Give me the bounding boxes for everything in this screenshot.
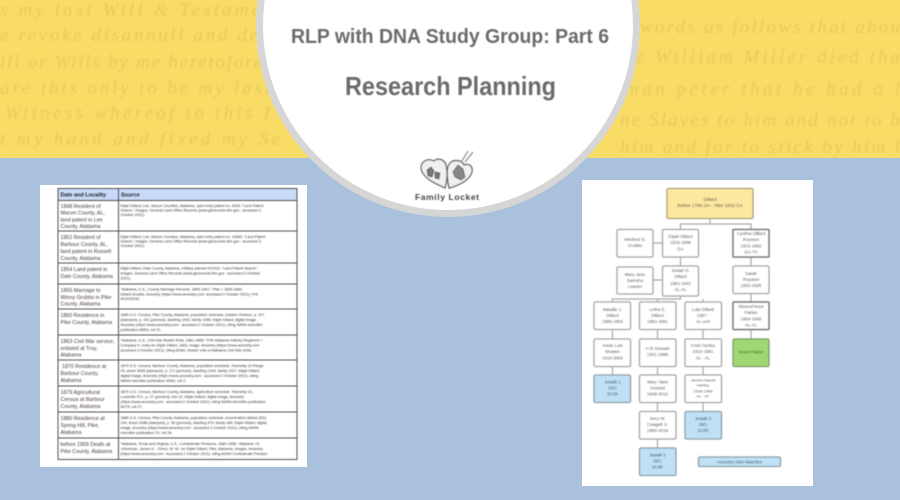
node labels: James Harold [691,378,715,382]
column: date and locality: Spring Hill, Pike, [60,423,99,429]
node labels: Elijah Dillard [668,234,693,239]
node labels: 1921-1998 [647,352,669,357]
column: source citations: NARA microfilm publication M593, roll 2. [120,379,186,383]
column: date and locality: County, Alabama [60,302,101,308]
banner: yellow handwritten document: him and for to stick by him l [620,137,900,158]
node labels: Dillard [651,313,664,318]
heading: study group title: RLP with DNA Study Group: Part 6 [291,26,609,48]
column: source citations: 1860 U.S. Census, Pike County, Alabama, population schedule, Eastern Division, p. 327 [120,313,264,317]
column: date and locality: Macon County, AL, [60,211,105,217]
node labels: Moates [605,349,620,354]
node labels: 1969-2019 [647,428,669,433]
column: date and locality: Alabama [60,352,81,358]
node labels: Royston [743,277,760,282]
node labels: Victor Parker [738,350,764,354]
node labels: Letha E. [649,307,666,312]
node labels: Annie Lois [602,343,624,348]
column: source citations: Elijah Dillard, Lee, Macon Counties, Alabama, cash entry patent no. 16589, "Land Patent [120,235,265,239]
column: source citations: publication M653, roll 21. [120,328,162,332]
node labels: 1816-1886 [670,240,692,245]
column: date and locality: 1870 Residence at [62,364,107,370]
column: source citations: microfilm publication T9, roll 28. [120,431,172,435]
banner: yellow handwritten document: ill or Wills by me heretofore [0,52,262,73]
node labels: H B Grissett [646,346,670,351]
node: Dillard root [667,188,753,218]
column headers: Source [121,192,140,198]
column: source citations: 1880 U.S. Census, Pike County, Alabama, population schedule, enumeration district (ED) [120,416,266,420]
nodes: DNA matches [594,375,780,476]
column: source citations: Louisville P.O., p. 27 (penned), line 22, Elijah Dillard; digital image, Ancestry [120,395,244,399]
column: date and locality: 1852 Resident of [60,235,101,241]
node labels: 3C1R [607,392,618,396]
node labels: GA [677,246,684,252]
node labels: Fred Hartley [691,343,716,348]
nodes: plain white people [594,230,769,439]
node labels: AL-unk [696,319,711,324]
column: source citations: Search," images, General Land Office Records (www.glorecords.blm.gov : accessed 3 [120,240,261,244]
icon: open heart locket [421,151,473,188]
banner: yellow handwritten document: t my hand and fixed my Se [0,129,280,150]
banner: yellow handwritten document: e revoke disannull and de [0,25,258,46]
column: date and locality: Winny Grubbs in Pike [60,295,111,301]
column: date and locality: 1863 Civil War service, [60,339,114,345]
column: date and locality: Barbour County, AL, [60,242,108,248]
column: date and locality: 1848 Resident of [60,204,101,210]
column: source citations: 149, sheet 159B (stamped), p. 69 (penned), dwelling 479, family 489, Elijah Dillard; digital [120,421,267,425]
node labels: Samaha [627,278,644,283]
column: source citations [120,204,267,456]
node labels: AL-AL [674,287,687,292]
node labels: 1815-1882 [740,244,762,248]
column: date and locality: County, Alabama [60,404,101,410]
column: date and locality: 1854 Land patent in [60,267,107,273]
node labels: AL-AL [745,322,758,328]
banner: yellow handwritten document: words as follows that abou [640,17,900,38]
column: source citations: October 2021). [120,244,145,248]
banner: yellow handwritten document: Witness whereof to this I [5,103,272,124]
column: source citations: 25, sheet 402B (stamped), p. 171 (penned), dwelling 1345, family 1427, Elijah Dillard [120,369,259,373]
node labels: Josiah 1 [604,380,621,384]
node labels: Parker [745,310,758,315]
node labels: AL - AT [697,394,710,398]
node labels: Hartley [697,382,709,388]
node: Dillard root: Dillard [703,197,717,202]
column headers: Date and Locality [60,192,107,198]
column: date and locality: Dale County, Alabama [60,274,113,280]
column: source citations: October 2021). [120,213,145,217]
column: date and locality: Pike County, Alabama [60,449,112,455]
column: source citations: 1879 U.S. Census, Barbour County, Alabama, agriculture schedule, Township 10, [120,390,253,394]
column: source citations: "Alabama, U.S., County Marriage Records, 1805-1967," Pike > 1835-1883, [120,288,243,292]
column headers [60,192,140,198]
node labels: 1948-2013 [647,392,669,396]
node labels: Josiah 3 [695,416,712,421]
logo wordmark: Family Locket [415,192,479,202]
column: date and locality: before 1909 Death at [60,442,111,448]
node labels: 29/1 [699,422,708,427]
column: date and locality: County, Alabama [60,256,101,262]
column: date and locality: 1855 Marriage to [60,288,101,294]
panel: DNA family tree chart [582,180,813,486]
column: source citations: 001933193. [120,297,140,301]
banner: yellow handwritten document: are this only to be my last [0,78,271,99]
node labels: 1897 - [697,313,710,318]
logo: Family Locket [415,151,479,202]
column: date and locality [60,204,114,455]
node labels: Josiah D. [671,268,690,273]
banner: yellow handwritten document: s my last Will & Testame [0,0,260,21]
column: source citations: Dillard-Grubbs, Ancestry (https://www.ancestry.com: accessed 2 October 2021); FHL [120,292,259,296]
column: date and locality: Census at Barbour [60,397,105,403]
column: source citations: image, Ancestry (https://www.ancestry.com : accessed 2 October 2021); citing NARA [120,426,259,430]
column: date and locality: 1860 Residence in [60,313,104,319]
column: source citations: 1870 U.S. Census, Barbour County, Alabama, population schedule, Township 10 Range [120,364,264,368]
banner: yellow handwritten document: ne Slaves to him and not to b [620,110,900,131]
column: source citations: Search," images, General Land Office Records (www.glorecords.blm.gov : accessed 3 [120,208,261,212]
column: source citations: 2021). [120,276,131,280]
title circle [260,0,636,214]
column: source citations: M279, roll 27. [120,405,143,409]
node: Victor Parker [733,339,769,366]
node labels: 3C2R [697,428,709,433]
node labels: Winifred B. [624,237,646,242]
node labels [602,231,766,470]
column: date and locality: land patent in Russell [60,249,111,255]
column: source citations: "Alabama, U.S., Civil War Muster Rolls, 1861-1865," 57th Alabama Infantry Regiment > [120,338,263,342]
node labels: Royston [743,237,760,242]
node labels: 1915-2004 [602,356,624,360]
node labels: 25/1 [653,458,662,464]
node labels: GA-TX [744,250,758,254]
node labels: 1886-1953 [602,319,624,324]
column: date and locality: land patent in Lee [60,217,103,223]
node labels: Leaster [628,284,643,289]
node labels: Grubbs [628,243,643,248]
node: Dillard root: Before 1795 GA - After 1815 GA [677,203,744,208]
node labels: Josiah 2 [649,452,666,458]
node labels: AL - AL [696,356,711,360]
column: source citations: "Alabama, Texas and Virginia, U.S., Confederate Pensions, 1884-1958," Alabama >D [120,442,260,446]
node labels: Mary Jane [625,272,646,277]
node labels: 1869-1950 [740,316,762,322]
node labels: 1862-1942 [670,281,692,286]
column: source citations: accessed 3 October 2021); citing ADAH, Muster rolls of Alabama Civil War Units. [120,348,252,352]
node labels: 1843-1925 [740,283,762,288]
table header [58,188,297,200]
node labels: Lula Dillard [692,307,715,312]
node labels: Mary Yann [647,380,668,384]
column: source citations: (stamped), p. 151 (penned), dwelling 1093, family 1065, Elijah Dillard; digital image, [120,318,257,322]
column: date and locality: Alabama [60,430,81,436]
heading: research planning: Research Planning [345,71,556,101]
node labels: Cowgell Jr. [647,422,668,427]
column: date and locality: enlisted at Troy, [60,346,98,352]
banner: yellow handwritten document [0,0,900,158]
column: date and locality: Alabama [60,378,81,384]
column: source citations: (https://www.ancestry.com : Accessed 2 October 2021); citing ADAH Confederate Pension [120,452,267,456]
node labels: Ancestry DNA Matches [717,460,763,464]
node labels: 1893-1981 [647,319,669,324]
tree connector lines [612,218,751,448]
node labels: Jerry W. [649,416,666,421]
node labels: Maudie J. [603,307,622,312]
node labels: 1938-1968 [693,388,713,394]
column: date and locality: County, Alabama [60,224,101,230]
node labels: Alonzo/Victor [738,304,764,309]
column: source citations: Company H, entry for Elijah Dillard, 1863, image, Ancestry (https://www.ancestry.com [120,344,259,348]
panel: research log table [40,185,307,467]
node labels: 24/1 [608,386,617,390]
banner: yellow handwritten document: man peter that he had a l [625,79,900,100]
column: source citations: digital image, Ancestry (https://www.ancestry.com : accessed 2 October 2021); citing [120,374,258,378]
column: source citations: Ancestry (https://www.ancestry.com : accessed 2 October 2021); citing NARA microfilm [120,323,262,327]
node labels: Sarah [745,271,757,276]
column: source citations: Elijah Dillard, Lee, Macon Counties, Alabama, cash entry patent no. 9349, "Land Patent [120,204,263,208]
column: source citations: Elijah Dillard, Dale County, Alabama, military warrant #21910, "Land Patent Search," [120,266,259,270]
node labels: Dillard [674,274,687,279]
column: date and locality: Pike County, Alabama [60,320,112,326]
column: date and locality: 1880 Residence at [60,416,105,422]
column: date and locality: 1879 Agricultural [60,390,100,396]
node labels: Dillard [606,313,619,318]
node labels: Grissett [650,386,666,390]
nodes: dark outlined people [733,230,769,330]
node labels: Cynthia Dillard [737,231,766,236]
banner: yellow handwritten document: e William Miller died tha [636,47,900,68]
column: source citations: (https://www.ancestry.com : accessed 2 October 2021); citing NARA microfilm publication [120,400,266,404]
node labels: 3C3R [652,464,663,470]
column: date and locality: Barbour County, [60,371,99,377]
node labels: 1915-1981 [692,349,714,354]
table grid [58,188,297,460]
column: source citations: >Devense, James H. - Dixon, W. W., for Elijah Dillard, Pike, Alabama, images, Ancestry [120,447,263,451]
column: source citations: images, General Land Office Records (www.glorecords.blm.gov : accessed 3 October [120,272,261,276]
